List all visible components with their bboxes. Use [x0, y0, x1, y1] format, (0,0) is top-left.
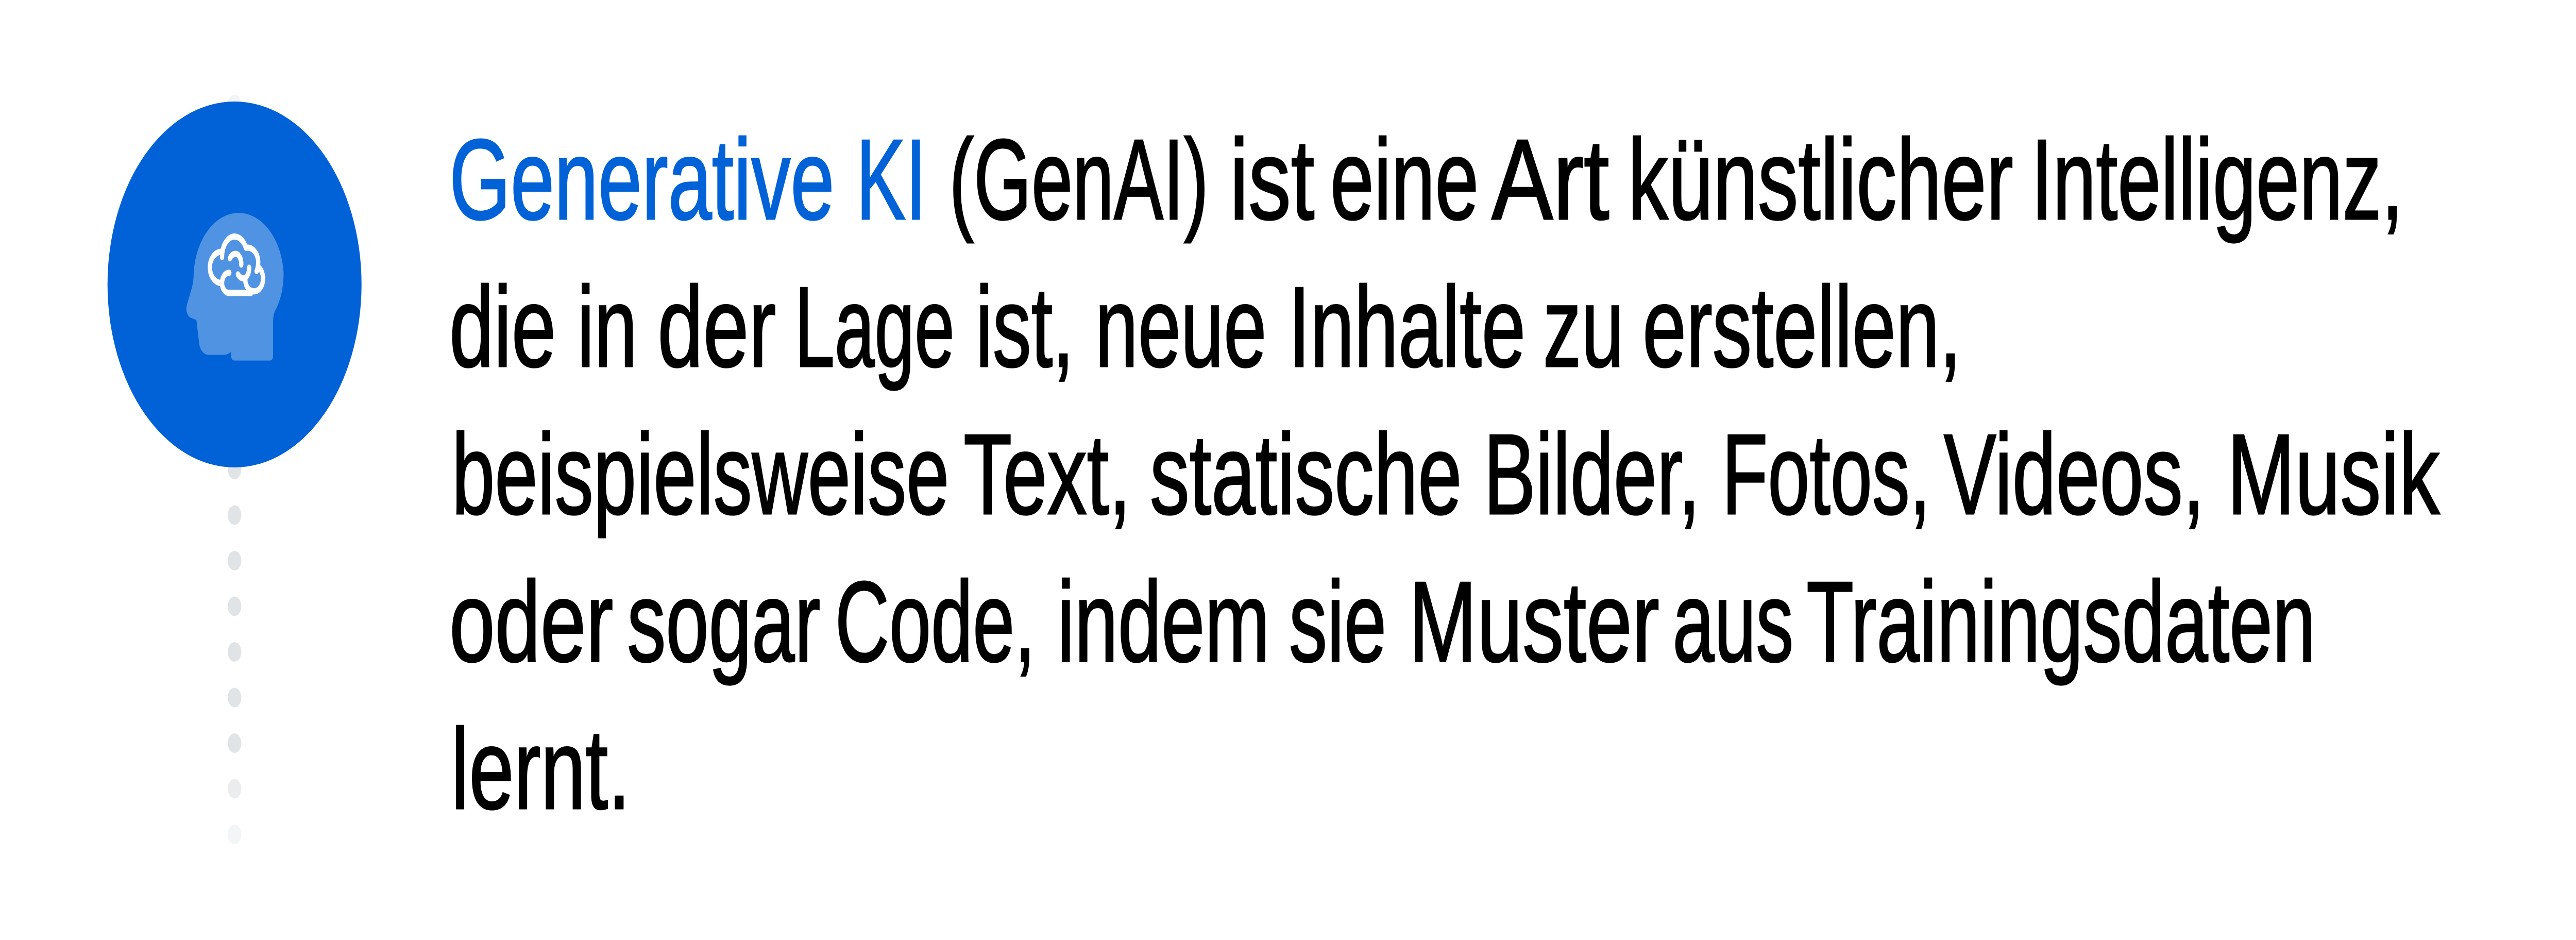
icon: head silhouette: [187, 213, 283, 361]
text line 2: ist,: [976, 263, 1074, 391]
text line 4: aus: [1673, 558, 1793, 686]
text line 1: eine: [1330, 116, 1479, 244]
text line 3: statische: [1150, 411, 1462, 539]
text line 2: erstellen,: [1642, 263, 1961, 391]
text line 4: Muster: [1409, 558, 1659, 686]
text line 3: beispielsweise: [452, 411, 949, 539]
text line 3: Videos,: [1944, 411, 2205, 539]
text line 2: [449, 263, 1961, 391]
text line 4: Trainingsdaten: [1806, 558, 2315, 686]
text line 1: [949, 116, 2403, 244]
icon: brain: [210, 237, 263, 293]
text line 2: zu: [1543, 263, 1624, 391]
text line 4: sie: [1289, 558, 1386, 686]
text line 4: Code,: [835, 558, 1036, 686]
text line 4: indem: [1057, 558, 1270, 686]
text line 3: Fotos,: [1722, 411, 1930, 539]
highlighted term: KI: [856, 116, 926, 244]
text line 2: die: [449, 263, 556, 391]
text line 1: Intelligenz,: [2031, 116, 2403, 244]
text line 3: [452, 411, 2440, 539]
text line 3: Musik: [2227, 411, 2440, 539]
highlighted term: Generative: [449, 116, 834, 244]
text line 5: lernt.: [451, 706, 631, 833]
text line 1: (GenAI): [949, 116, 1209, 244]
text line 4: [449, 558, 2315, 686]
text line 2: neue: [1095, 263, 1266, 391]
text line 4: sogar: [627, 558, 820, 686]
text line 3: Bilder,: [1484, 411, 1700, 539]
text line 2: Inhalte: [1289, 263, 1526, 391]
text line 1: Art: [1492, 116, 1609, 244]
text line 2: in: [577, 263, 637, 391]
text line 4: oder: [449, 558, 613, 686]
text line 1: künstlicher: [1628, 116, 2013, 244]
text line 1: ist: [1230, 116, 1314, 244]
definition text block: [449, 116, 2440, 833]
text line 2: der: [657, 263, 776, 391]
text line 2: Lage: [794, 263, 955, 391]
dotted timeline: [228, 95, 241, 844]
text line 3: Text,: [963, 411, 1131, 539]
icon: blue circle with head and brain: [108, 102, 362, 467]
